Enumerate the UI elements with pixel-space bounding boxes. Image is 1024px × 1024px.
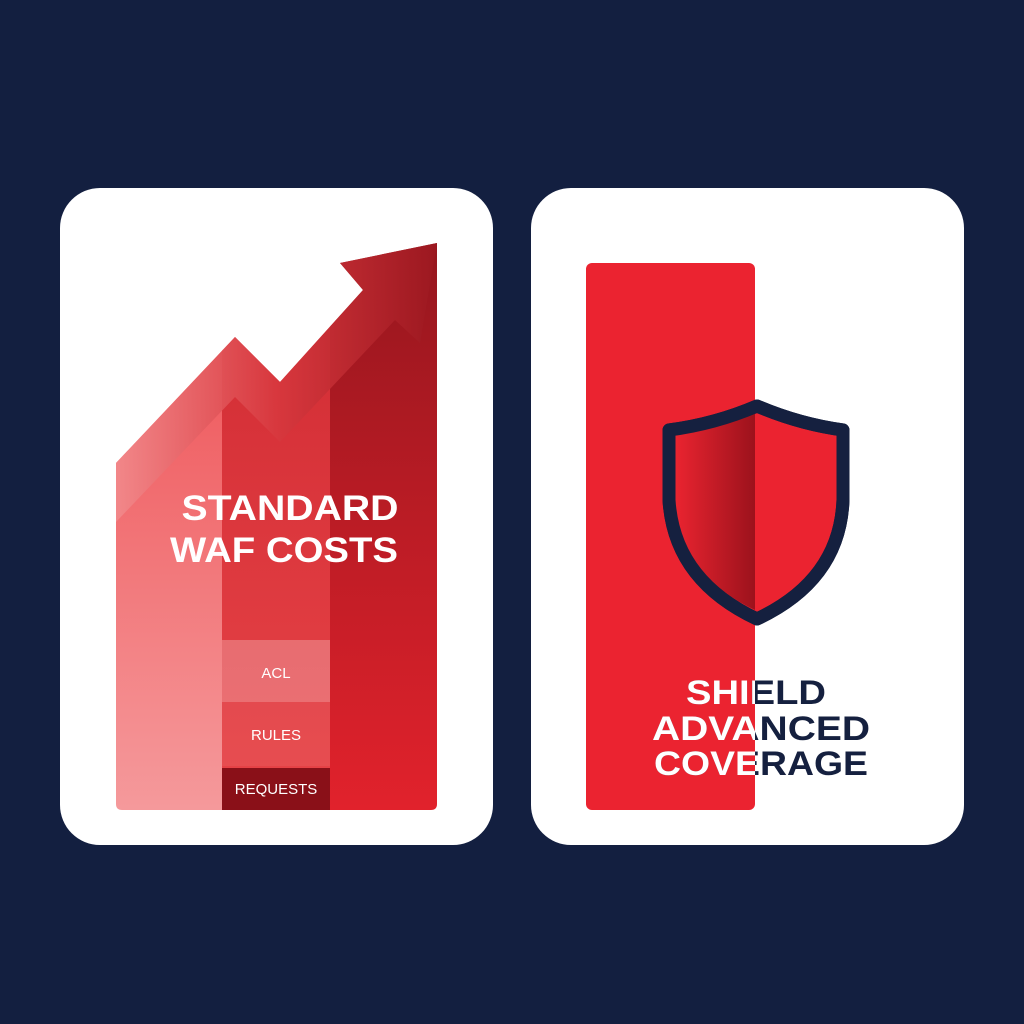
icon: shield (669, 406, 843, 619)
title: ADVANCED (652, 710, 870, 748)
title: COVERAGE (654, 745, 868, 783)
title (653, 680, 868, 776)
title: COVERAGE (654, 745, 868, 783)
title (170, 489, 398, 570)
title: STANDARD (182, 489, 398, 528)
title: SHIELD (686, 674, 826, 712)
label: ACL: ACL (261, 665, 291, 682)
label: REQUESTS (222, 768, 330, 810)
panel: standard WAF costs (60, 188, 493, 845)
title: ADVANCED (652, 710, 870, 748)
title: SHIELD (686, 674, 826, 712)
label: ACL (222, 640, 330, 702)
label: RULES: RULES (251, 727, 301, 744)
bar chart columns (116, 240, 437, 815)
panel: shield advanced coverage (531, 188, 964, 845)
infographic (60, 188, 964, 845)
title: WAF COSTS (170, 531, 398, 570)
label: RULES (222, 702, 330, 766)
arrow: rising cost (116, 243, 437, 522)
label: REQUESTS: REQUESTS (235, 781, 317, 798)
red bar (586, 263, 755, 810)
